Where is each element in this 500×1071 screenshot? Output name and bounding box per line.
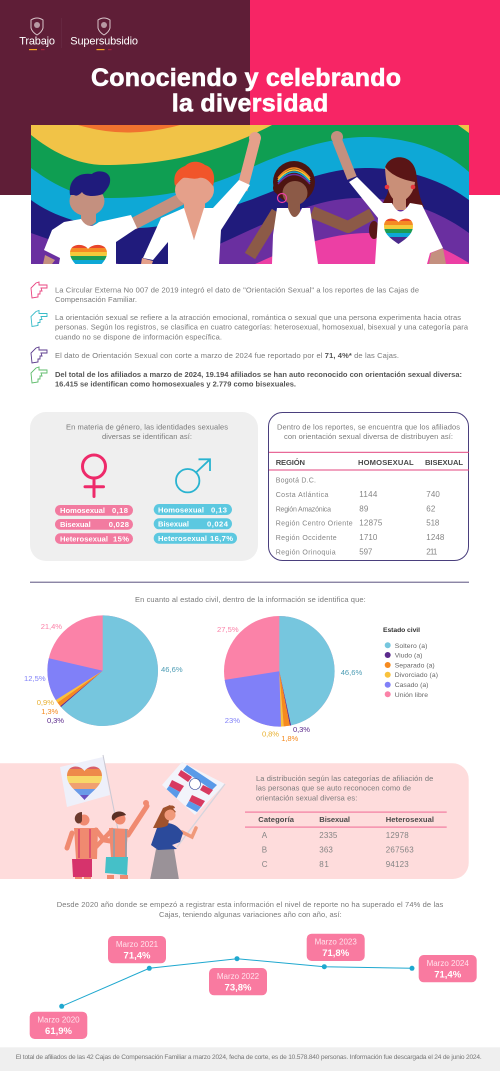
intro text: orientación sexual diversa es: — [256, 794, 357, 802]
legend: civil status: Soltero (a) — [395, 643, 427, 650]
male percentages — [154, 504, 237, 544]
intro text — [256, 774, 433, 802]
bullet 2: cuando no se dispone de información específica. — [55, 332, 222, 342]
panel: regional table: Región Centro Oriente — [276, 521, 353, 528]
panel: regional table: 518 — [426, 519, 440, 528]
text: reporting level intro — [57, 900, 444, 919]
icon: male symbol — [176, 459, 210, 492]
pie chart: civil status women: 0,9% — [37, 698, 54, 707]
legend: civil status: Unión libre — [395, 692, 428, 699]
category table: C — [262, 860, 268, 869]
logo: Trabajo — [19, 18, 55, 50]
person 4: long hair and heart shirt — [331, 131, 446, 264]
callout: March 2020: Marzo 2020 — [37, 1016, 80, 1025]
heading: civil status: En cuanto al estado civil, dentro de la información se identifica que: — [135, 595, 366, 604]
category table: 94123 — [386, 860, 409, 869]
female percentages — [55, 505, 133, 544]
category table: 267563 — [386, 845, 414, 854]
category table: Categoría — [258, 815, 295, 824]
pie chart: civil status men: 23% — [225, 716, 240, 725]
panel: regional table: 1710 — [359, 533, 378, 542]
callout: March 2021: Marzo 2021 — [116, 940, 159, 949]
logo: Supersubsidio — [62, 18, 138, 50]
intro list — [31, 282, 469, 388]
bullet 4 — [31, 367, 462, 388]
person 1: blue hair — [43, 171, 185, 268]
panel: regional table: Bogotá D.C. — [276, 478, 316, 485]
panel: regional table: 211 — [426, 547, 438, 556]
logo: Trabajo: Trabajo — [19, 35, 55, 47]
callout: March 2023: Marzo 2023 — [315, 938, 357, 947]
flag: second flag — [162, 762, 225, 847]
panel: affiliation categories — [0, 755, 469, 880]
pie chart: civil status men: 1,8% — [281, 734, 299, 743]
panel: regional table: 1248 — [426, 533, 445, 542]
panel: regional table: 597 — [359, 547, 373, 556]
figure: middle person — [95, 800, 149, 880]
panel: gender identities: diversas se identifican así: — [102, 432, 192, 441]
callout: March 2022: 73,8% — [225, 982, 252, 993]
bullet 1: La Circular Externa No 007 de 2019 integró el dato de "Orientación Sexual" a los reportes de las Cajas de — [55, 286, 419, 294]
category table: 81 — [319, 860, 329, 869]
pie chart: civil status men — [217, 616, 363, 743]
person 3: rainbow headband — [250, 161, 372, 264]
figure: left person — [67, 812, 116, 880]
panel: regional table: 62 — [426, 504, 436, 513]
panel: regional table: HOMOSEXUAL — [358, 458, 414, 467]
panel: regional table: Costa Atlántica — [276, 492, 328, 499]
female percentages: 15% — [113, 534, 129, 544]
callout: March 2024 — [419, 955, 477, 982]
bullet 4: Del total de los afiliados a marzo de 2024, 19.194 afiliados se han auto reconocido con orientación sexual diversa: — [55, 370, 462, 379]
panel: regional table: 1144 — [359, 490, 378, 499]
panel: regional table: con orientación sexual diversa de distribuyen así: — [284, 432, 453, 441]
bullet 2: La orientación sexual se refiere a la atracción emocional, romántica o sexual que una persona experimenta hacia otras — [55, 313, 461, 322]
bullet 1: Compensación Familiar. — [55, 295, 137, 304]
male percentages: Homosexual — [158, 505, 204, 514]
legend: civil status — [383, 627, 438, 699]
text: reporting level intro: Desde 2020 año donde se empezó a registrar esta información el nivel de reporte no ha superado el 74% de las — [57, 900, 444, 909]
legend: civil status: Divorciado (a) — [395, 672, 438, 679]
pie chart: civil status women: 46,6% — [161, 665, 183, 674]
callout: March 2024: 71,4% — [434, 969, 462, 980]
panel: gender identities: En materia de género, las identidades sexuales — [66, 422, 228, 432]
category table: Heterosexual — [386, 815, 434, 824]
line chart: reporting level by year — [30, 934, 477, 1039]
bullet 3: El dato de Orientación Sexual con corte a marzo de 2024 fue reportado por el 71, 4%* de las Cajas. — [55, 351, 399, 360]
female percentages: Heterosexual — [60, 534, 108, 544]
pie chart: civil status men: 0,8% — [262, 730, 279, 738]
callout: March 2023: 71,8% — [322, 948, 350, 959]
pie chart: civil status women — [24, 615, 183, 726]
panel: regional table: BISEXUAL — [425, 458, 463, 467]
category table — [245, 812, 447, 869]
panel: regional table: REGIÓN — [276, 458, 305, 467]
female percentages: Homosexual — [60, 506, 105, 515]
banner illustration: rainbow and four people — [31, 125, 469, 275]
title: Conociendo y celebrando — [91, 64, 401, 92]
panel: regional table: Región Amazónica — [276, 506, 331, 513]
intro text: La distribución según las categorías de afiliación de — [256, 774, 433, 783]
panel: regional table: 12875 — [359, 519, 383, 528]
icon: green pointing hand — [31, 367, 47, 383]
title — [91, 64, 401, 118]
pie chart: civil status women: 21,4% — [41, 622, 62, 631]
callout: March 2022: Marzo 2022 — [217, 972, 260, 981]
callout: March 2022 — [209, 968, 267, 995]
male percentages: 16,7% — [210, 534, 233, 543]
bullet 4: 16.415 se identifican como homosexuales y 2.779 como bisexuales. — [55, 380, 296, 388]
panel: regional table: Región Orinoquia — [276, 549, 336, 556]
bullet 2 — [31, 310, 469, 342]
bullet 3 — [31, 347, 399, 363]
icon: cyan pointing hand — [31, 310, 47, 326]
callout: March 2024: Marzo 2024 — [427, 959, 469, 968]
pie chart: civil status women: 1,3% — [41, 707, 59, 716]
legend: civil status: Casado (a) — [395, 682, 428, 689]
intro text: las personas que se auto reconocen como de — [256, 784, 411, 793]
bullet 2: personas. Según los registros, se clasifica en cuatro categorías: heterosexual, homosexual, bisexual y una categoría para — [55, 322, 469, 332]
female percentages: 0,18 — [112, 506, 128, 515]
male percentages: Heterosexual — [158, 534, 207, 543]
legend: civil status: Estado civil — [383, 627, 420, 634]
panel: regional table: Dentro de los reportes, se encuentra que los afiliados — [277, 422, 460, 432]
category table: B — [262, 845, 267, 854]
female percentages: Bisexual — [60, 520, 91, 529]
callout: March 2021: 71,4% — [124, 950, 151, 961]
panel: regional table — [268, 412, 469, 560]
callout: March 2021 — [108, 936, 166, 963]
figure: right person — [150, 805, 196, 880]
illustration: people with pride flags — [60, 755, 225, 880]
footer note: El total de afiliados de las 42 Cajas de Compensación Familiar a marzo 2024, fecha de corte, es de 10.578.840 personas. Información fue descargada el 24 de junio 2024. — [16, 1054, 482, 1061]
panel: regional table: 740 — [426, 490, 440, 499]
male percentages: 0,024 — [207, 520, 229, 528]
legend: civil status: Viudo (a) — [395, 652, 422, 660]
person 2: orange hair — [141, 132, 261, 264]
icon: pink pointing hand — [31, 282, 47, 298]
category table: Bisexual — [319, 815, 350, 824]
pie chart: civil status men: 27,5% — [217, 625, 239, 634]
logo: Supersubsidio: Supersubsidio — [70, 35, 138, 47]
category table: 12978 — [386, 831, 409, 840]
title: la diversidad — [172, 90, 328, 118]
header background — [0, 0, 500, 195]
category table: 363 — [319, 845, 333, 854]
category table: A — [262, 831, 268, 840]
callout: March 2020 — [30, 1012, 87, 1039]
male percentages: 0,13 — [211, 505, 227, 514]
icon: purple pointing hand — [31, 347, 47, 363]
pie chart: civil status women: 12,5% — [24, 674, 46, 683]
callout: March 2023 — [307, 934, 365, 961]
category table: 2335 — [319, 831, 338, 840]
footer note — [0, 1047, 500, 1071]
pie chart: civil status women: 0,3% — [47, 716, 64, 725]
text: reporting level intro: Cajas, teniendo algunas variaciones año con año, así: — [159, 910, 342, 919]
icon: female symbol — [82, 455, 106, 496]
panel: regional table: Región Occidente — [276, 535, 337, 542]
male percentages: Bisexual — [158, 520, 189, 528]
pie chart: civil status men: 0,3% — [293, 725, 310, 734]
pie chart: civil status men: 46,6% — [341, 668, 363, 677]
flag: rainbow heart — [60, 755, 118, 830]
female percentages: 0,028 — [109, 520, 129, 529]
callout: March 2020: 61,9% — [45, 1026, 73, 1037]
bullet 1 — [31, 282, 419, 304]
legend: civil status: Separado (a) — [395, 662, 435, 670]
panel: regional table: 89 — [359, 504, 369, 513]
panel: gender identities — [30, 412, 258, 561]
